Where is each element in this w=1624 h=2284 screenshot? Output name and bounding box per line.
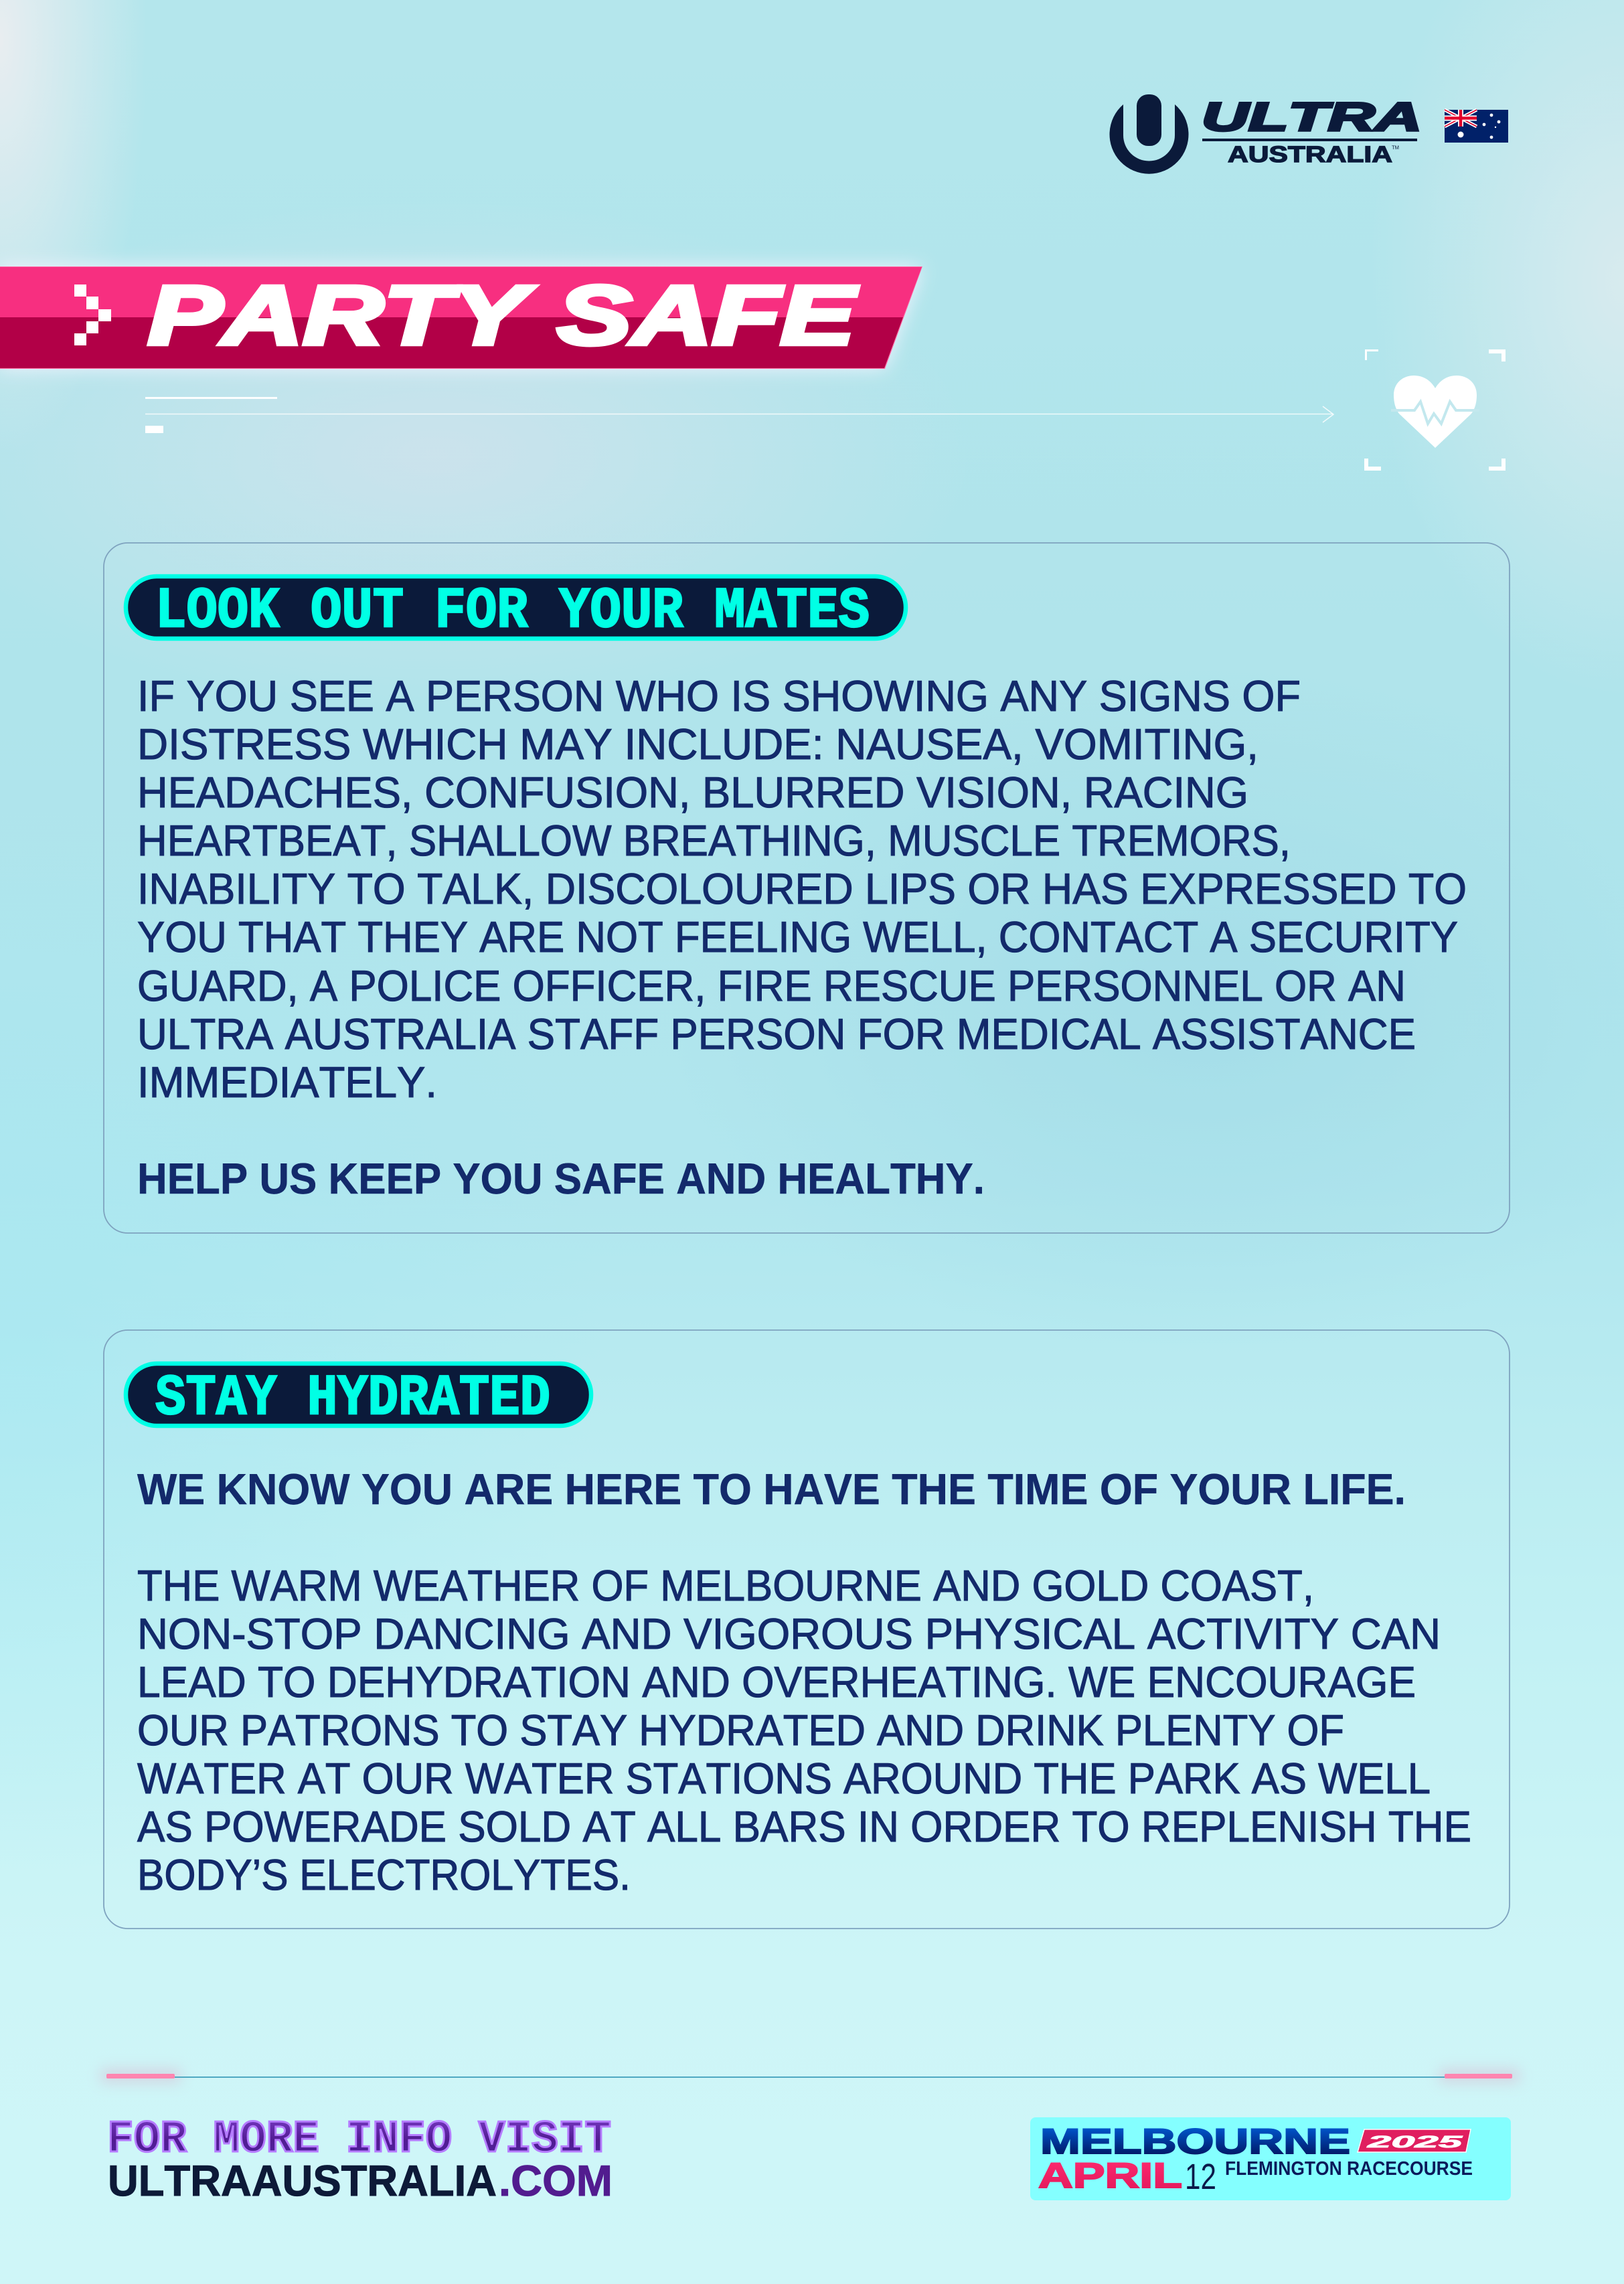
title banner: PARTY SAFE <box>0 266 922 369</box>
body text: GUARD, A POLICE OFFICER, FIRE RESCUE PERSONNEL OR AN <box>137 961 1406 1010</box>
footer link block <box>107 2114 613 2205</box>
event date badge <box>1030 2117 1511 2200</box>
body text: OUR PATRONS TO STAY HYDRATED AND DRINK PLENTY OF <box>137 1706 1344 1755</box>
icon: Ultra power-U mark <box>1110 94 1189 174</box>
city: MELBOURNE <box>1040 2122 1350 2161</box>
pill heading: STAY HYDRATED <box>155 1366 550 1431</box>
panel: stay hydrated <box>104 1330 1510 1929</box>
body text: AS POWERADE SOLD AT ALL BARS IN ORDER TO REPLENISH THE <box>137 1802 1471 1851</box>
body text: HEADACHES, CONFUSION, BLURRED VISION, RACING <box>137 768 1248 817</box>
icon: pixel chevron <box>74 284 111 345</box>
venue: FLEMINGTON RACECOURSE <box>1225 2158 1473 2180</box>
year tag <box>1358 2129 1471 2152</box>
year tag: 2025 <box>1366 2133 1464 2151</box>
logo wordmark: ULTRA: ULTRA <box>1202 94 1422 139</box>
bold callout: HELP US KEEP YOU SAFE AND HEALTHY. <box>137 1154 985 1203</box>
icon: heart with pulse in frame <box>1364 349 1506 471</box>
icon: Australian flag <box>1445 110 1508 143</box>
decorative line with arrow <box>145 397 1333 433</box>
body text <box>137 671 1467 1107</box>
body text: DISTRESS WHICH MAY INCLUDE: NAUSEA, VOMITING, <box>137 720 1258 768</box>
day: 12 <box>1185 2157 1216 2197</box>
body text: IF YOU SEE A PERSON WHO IS SHOWING ANY SIGNS OF <box>137 671 1301 720</box>
heading text: PARTY SAFE <box>148 269 858 362</box>
body text: IMMEDIATELY. <box>137 1058 437 1107</box>
logo rule <box>1202 139 1417 141</box>
body text: YOU THAT THEY ARE NOT FEELING WELL, CONTACT A SECURITY <box>137 912 1458 961</box>
body text: WATER AT OUR WATER STATIONS AROUND THE PARK AS WELL <box>137 1754 1431 1803</box>
month: APRIL <box>1038 2156 1182 2196</box>
footer divider with pink accents <box>100 2068 1520 2083</box>
body text: BODY’S ELECTROLYTES. <box>137 1850 631 1899</box>
body text: THE WARM WEATHER OF MELBOURNE AND GOLD COAST, <box>137 1561 1314 1610</box>
website url: ULTRAAUSTRALIA <box>108 2156 497 2205</box>
label: for more info visit: FOR MORE INFO VISIT <box>107 2114 611 2166</box>
body text: NON-STOP DANCING AND VIGOROUS PHYSICAL ACTIVITY CAN <box>137 1609 1441 1658</box>
bold callout: WE KNOW YOU ARE HERE TO HAVE THE TIME OF YOUR LIFE. <box>137 1465 1406 1514</box>
body text: LEAD TO DEHYDRATION AND OVERHEATING. WE ENCOURAGE <box>137 1657 1416 1706</box>
body text: ULTRA AUSTRALIA STAFF PERSON FOR MEDICAL ASSISTANCE <box>137 1009 1416 1058</box>
body text <box>137 1561 1471 1899</box>
body text: HEARTBEAT, SHALLOW BREATHING, MUSCLE TREMORS, <box>137 816 1291 865</box>
panel: look out for your mates <box>104 543 1510 1233</box>
logo wordmark: AUSTRALIA: AUSTRALIA <box>1228 142 1392 167</box>
logo: Ultra Australia <box>1110 94 1422 174</box>
trademark mark: TM <box>1392 145 1399 151</box>
website url: .COM <box>499 2156 613 2205</box>
pill heading: LOOK OUT FOR YOUR MATES <box>155 578 870 644</box>
body text: INABILITY TO TALK, DISCOLOURED LIPS OR HAS EXPRESSED TO <box>137 864 1467 913</box>
